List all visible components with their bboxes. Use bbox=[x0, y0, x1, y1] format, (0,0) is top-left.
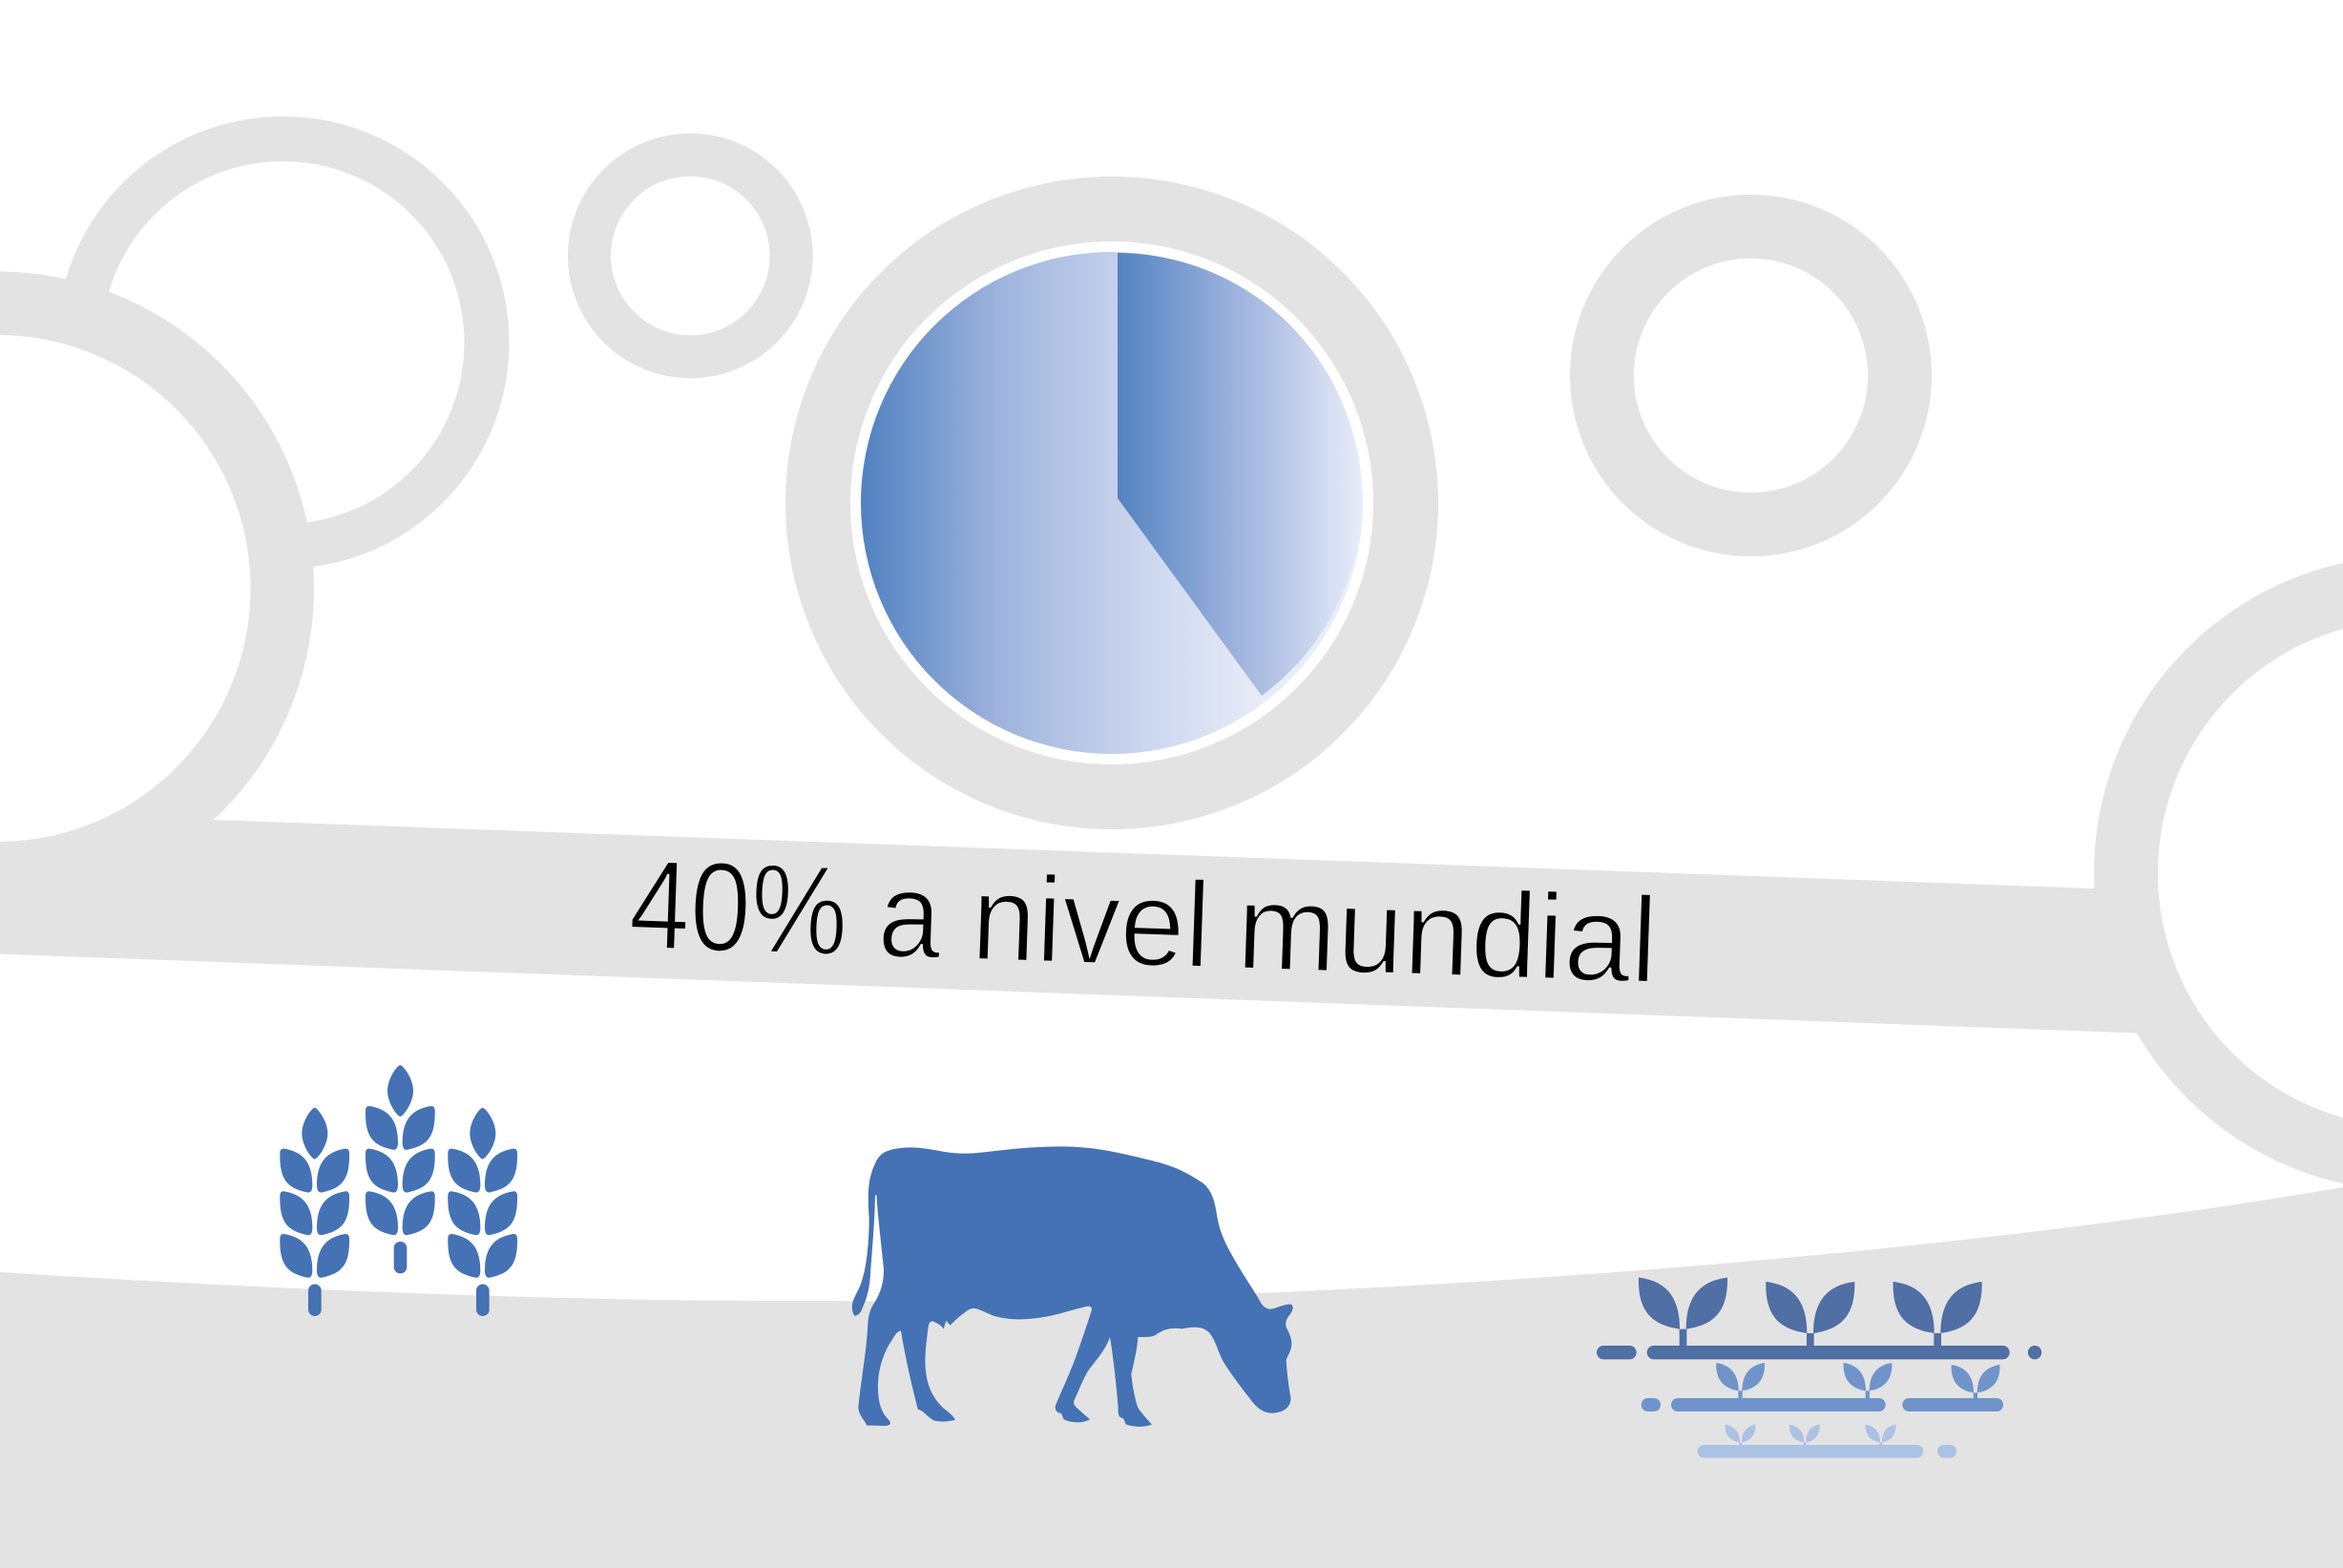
ring: small top circle bbox=[590, 155, 791, 357]
banner text: mundial bbox=[1235, 859, 1660, 1010]
banner: grey band bbox=[0, 812, 2195, 1035]
pie chart: 40% share bbox=[861, 252, 1363, 754]
ring: right large circle bbox=[2126, 588, 2343, 1159]
seedling row: back light bbox=[1698, 1425, 1956, 1458]
banner text: a bbox=[876, 847, 944, 985]
banner text bbox=[627, 834, 1660, 1011]
icon: wheat stalks bbox=[280, 1065, 517, 1316]
seedling row: middle bbox=[1642, 1363, 2003, 1411]
banner text: nivel bbox=[970, 849, 1213, 994]
icon: seedling rows bbox=[1597, 1278, 2041, 1458]
ring: upper-right circle bbox=[1601, 226, 1900, 525]
ring: around pie chart bbox=[818, 209, 1406, 797]
banner text: 40% bbox=[627, 834, 850, 983]
pie remainder slice bbox=[861, 252, 1363, 754]
ring: left large circle bbox=[0, 303, 282, 873]
icon: grazing cow bbox=[852, 1146, 1293, 1427]
seedling row: front dark bbox=[1597, 1278, 2041, 1359]
ring: top-left circle bbox=[79, 139, 487, 546]
ground: grey field bbox=[0, 1187, 2343, 1568]
pie highlighted 40% slice bbox=[1118, 253, 1362, 696]
